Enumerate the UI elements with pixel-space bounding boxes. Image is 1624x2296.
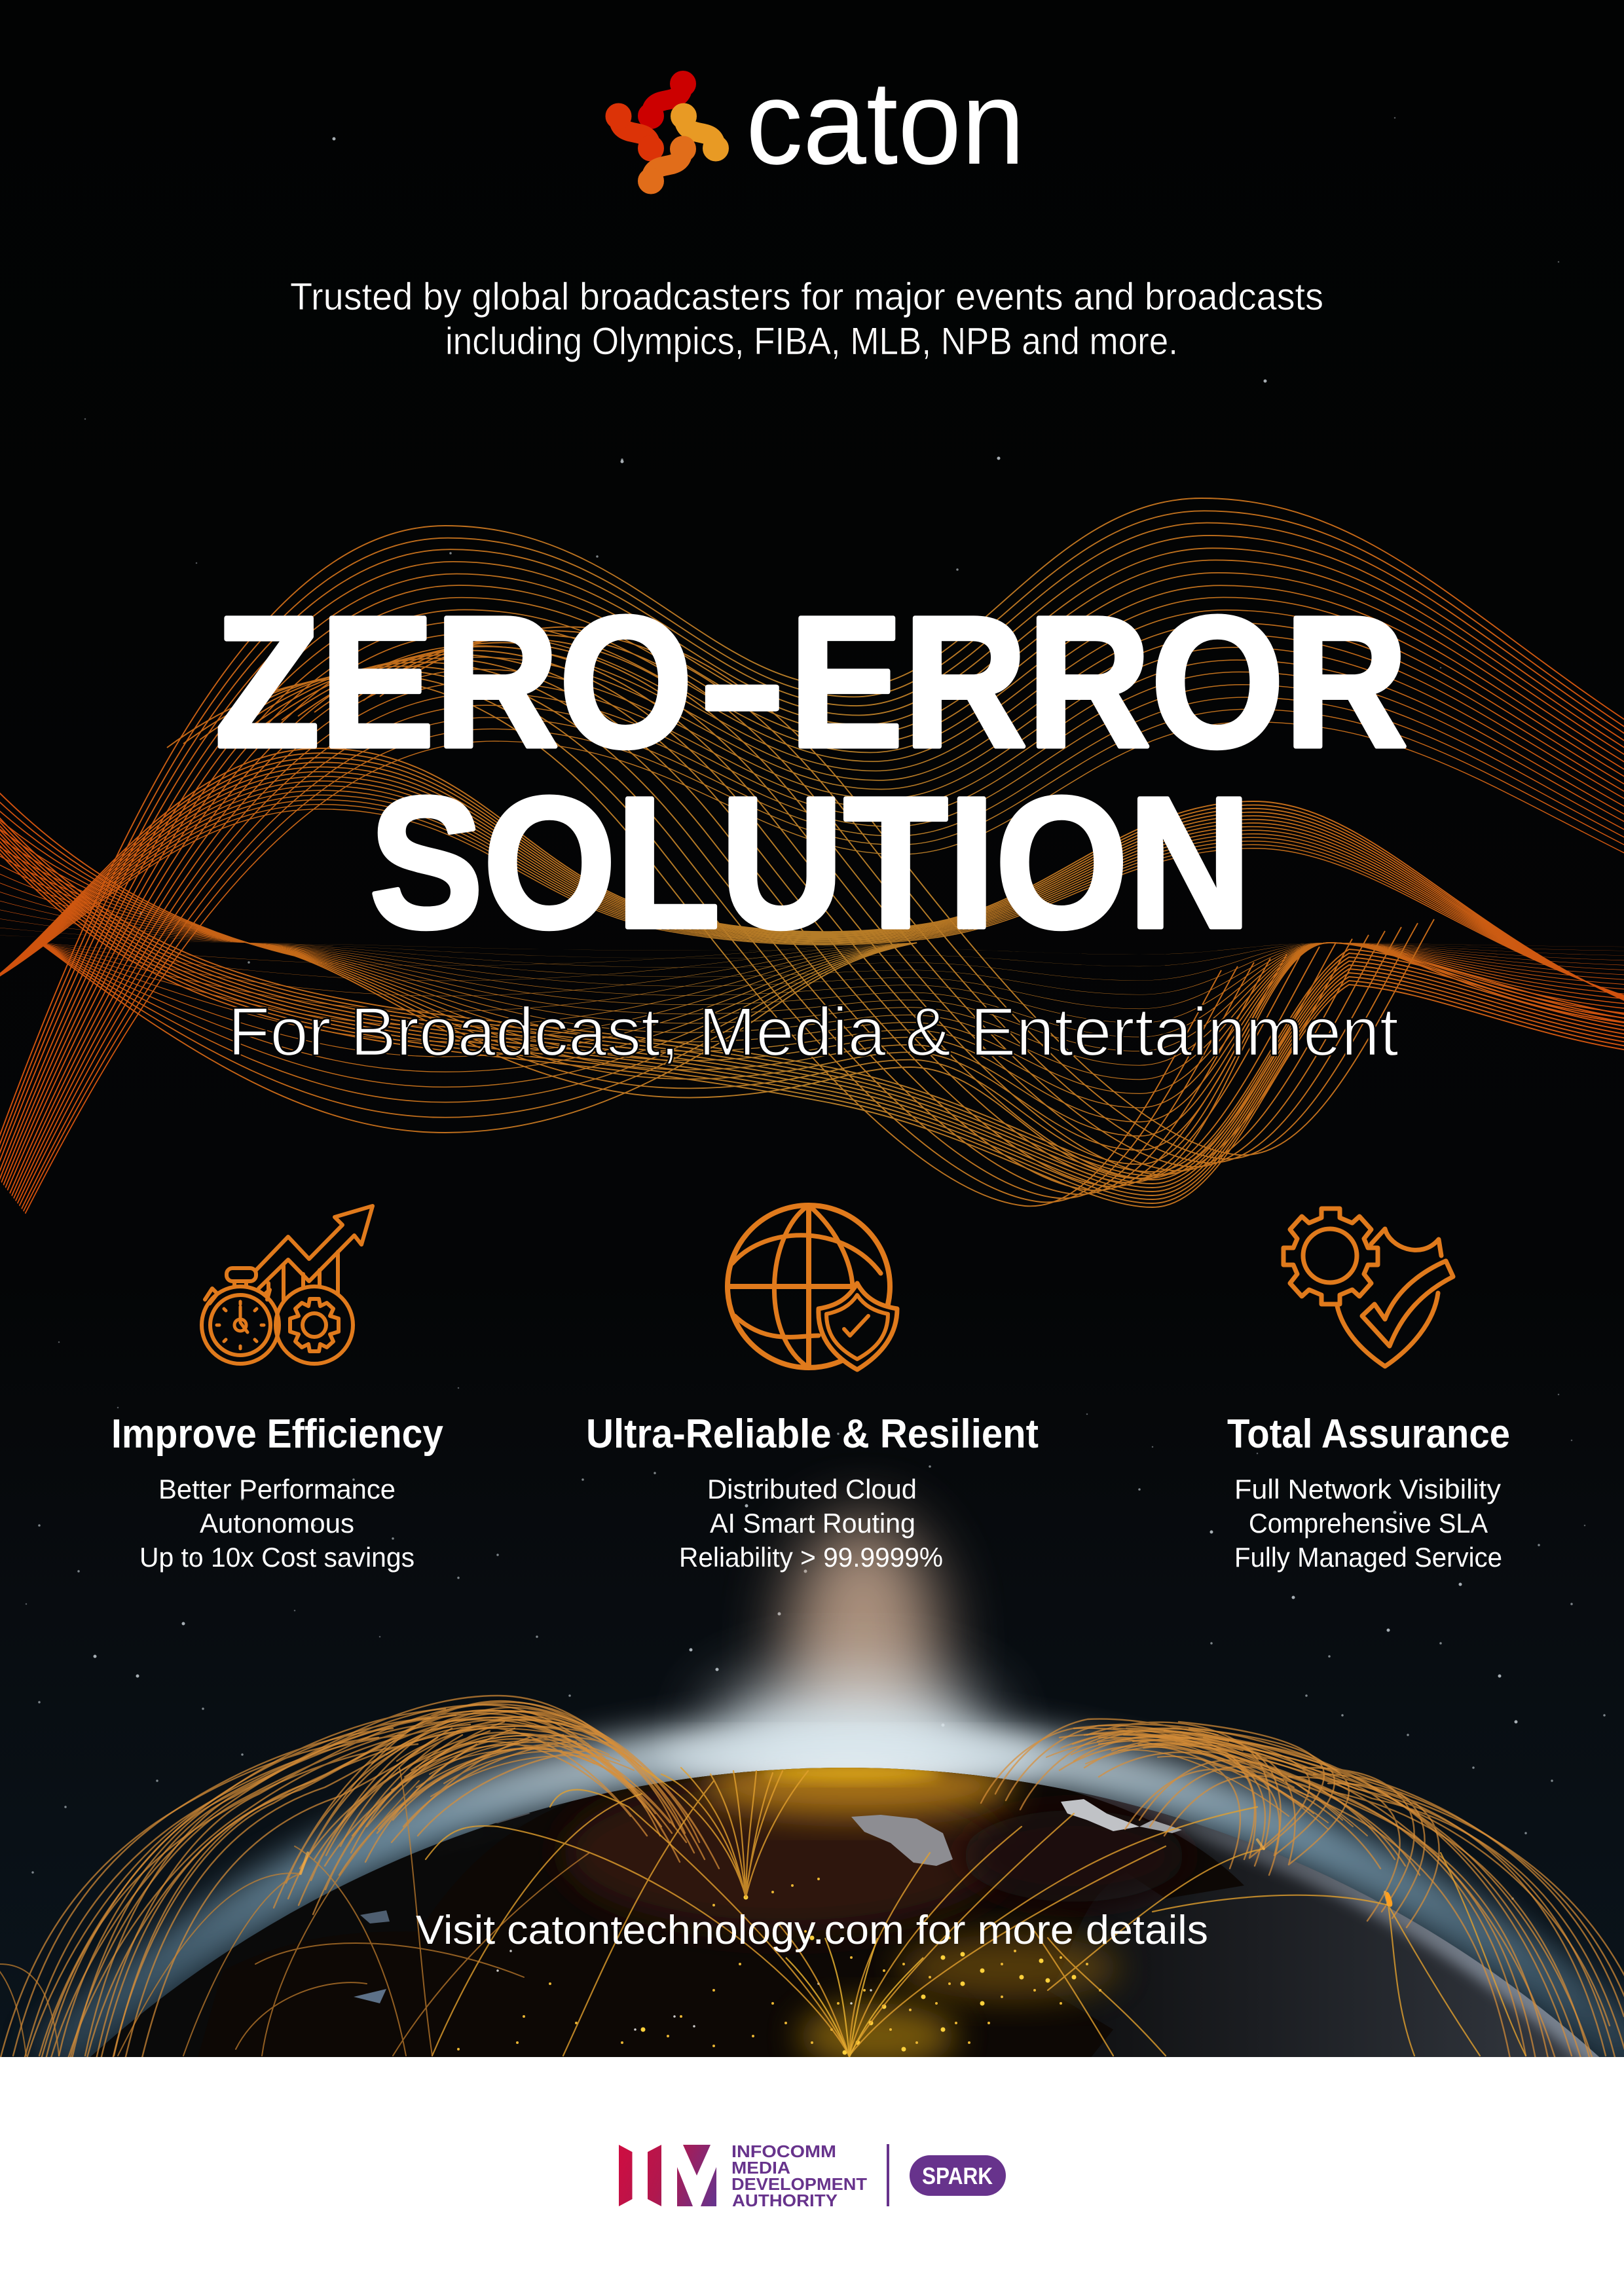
icon: globe with shield bbox=[728, 1205, 897, 1370]
logo: caton bbox=[612, 56, 1025, 189]
bottom lights fan bbox=[786, 1938, 923, 2057]
panel: total assurance: Full Network Visibility bbox=[1234, 1474, 1501, 1504]
panel: total assurance: Total Assurance bbox=[1227, 1412, 1510, 1457]
globe bbox=[90, 1768, 1599, 2057]
IMDA wordmark: INFOCOMM bbox=[731, 2141, 836, 2161]
logo: IMDA and SPARK bbox=[619, 2141, 1006, 2210]
panel: improve efficiency: Improve Efficiency bbox=[111, 1412, 443, 1457]
intro text: Trusted by global broadcasters for major events and broadcasts bbox=[290, 276, 1323, 318]
panel: improve efficiency: Better Performance bbox=[158, 1474, 396, 1504]
intro text: including Olympics, FIBA, MLB, NPB and more. bbox=[445, 320, 1178, 363]
orange wave line ribbons bbox=[0, 498, 1624, 1244]
background stars bbox=[26, 118, 1604, 1899]
left diagonal band bbox=[0, 773, 1624, 1207]
logo mark bbox=[612, 77, 722, 187]
panel: total assurance: Fully Managed Service bbox=[1234, 1542, 1502, 1573]
network arcs around globe bbox=[0, 1696, 1624, 2071]
footer panel bbox=[0, 2057, 1624, 2296]
title: SOLUTION bbox=[369, 759, 1251, 967]
atmosphere halo around globe bbox=[49, 1743, 1624, 2062]
upper wave family bbox=[0, 498, 1624, 1244]
icon: stopwatch, gear and growth arrow bbox=[202, 1206, 373, 1364]
panel: improve efficiency: Autonomous bbox=[200, 1508, 354, 1539]
title: ZERO bbox=[215, 578, 693, 786]
title bbox=[215, 578, 1408, 967]
panel: improve efficiency bbox=[111, 1412, 443, 1573]
IMDA wordmark bbox=[731, 2141, 867, 2210]
title: ERROR bbox=[789, 578, 1408, 786]
logo wordmark: caton bbox=[746, 56, 1025, 189]
SPARK pill bbox=[910, 2155, 1006, 2196]
panel: ultra-reliable and resilient: Ultra-Reliable & Resilient bbox=[586, 1412, 1039, 1457]
panel: ultra-reliable and resilient: Distributed Cloud bbox=[707, 1474, 917, 1504]
panel: ultra-reliable and resilient: AI Smart Routing bbox=[710, 1508, 915, 1539]
light beam above the globe bbox=[655, 1519, 1048, 1785]
website call to action: Visit catontechnology.com for more details bbox=[416, 1908, 1208, 1953]
SPARK pill: SPARK bbox=[922, 2162, 993, 2189]
globe: dark continent bbox=[513, 1771, 1244, 2057]
subtitle: For Broadcast, Media & Entertainment bbox=[228, 994, 1399, 1070]
lower belly family bbox=[0, 753, 1624, 1178]
left hump and right crest ribbon bbox=[0, 748, 1624, 1021]
globe: snowy land patches bbox=[354, 1799, 1182, 2003]
panel: ultra-reliable and resilient: Reliability > 99.9999% bbox=[679, 1542, 943, 1573]
icon: gear with shield check bbox=[1283, 1209, 1453, 1366]
panel: improve efficiency: Up to 10x Cost savings bbox=[139, 1542, 415, 1573]
panel: ultra-reliable and resilient bbox=[586, 1412, 1039, 1573]
IMDA wordmark: AUTHORITY bbox=[732, 2191, 838, 2210]
panel: total assurance bbox=[1227, 1412, 1510, 1573]
IMDA wordmark: MEDIA bbox=[731, 2158, 790, 2178]
IMDA wordmark: DEVELOPMENT bbox=[731, 2174, 867, 2194]
title: - bbox=[698, 578, 786, 786]
panel: total assurance: Comprehensive SLA bbox=[1249, 1508, 1488, 1539]
intro text bbox=[290, 276, 1323, 363]
crossing diagonal family bbox=[167, 627, 1434, 1206]
globe: city lights bbox=[897, 1935, 1120, 2000]
left dip family bbox=[39, 943, 917, 1133]
IMDA mark bbox=[619, 2145, 716, 2206]
